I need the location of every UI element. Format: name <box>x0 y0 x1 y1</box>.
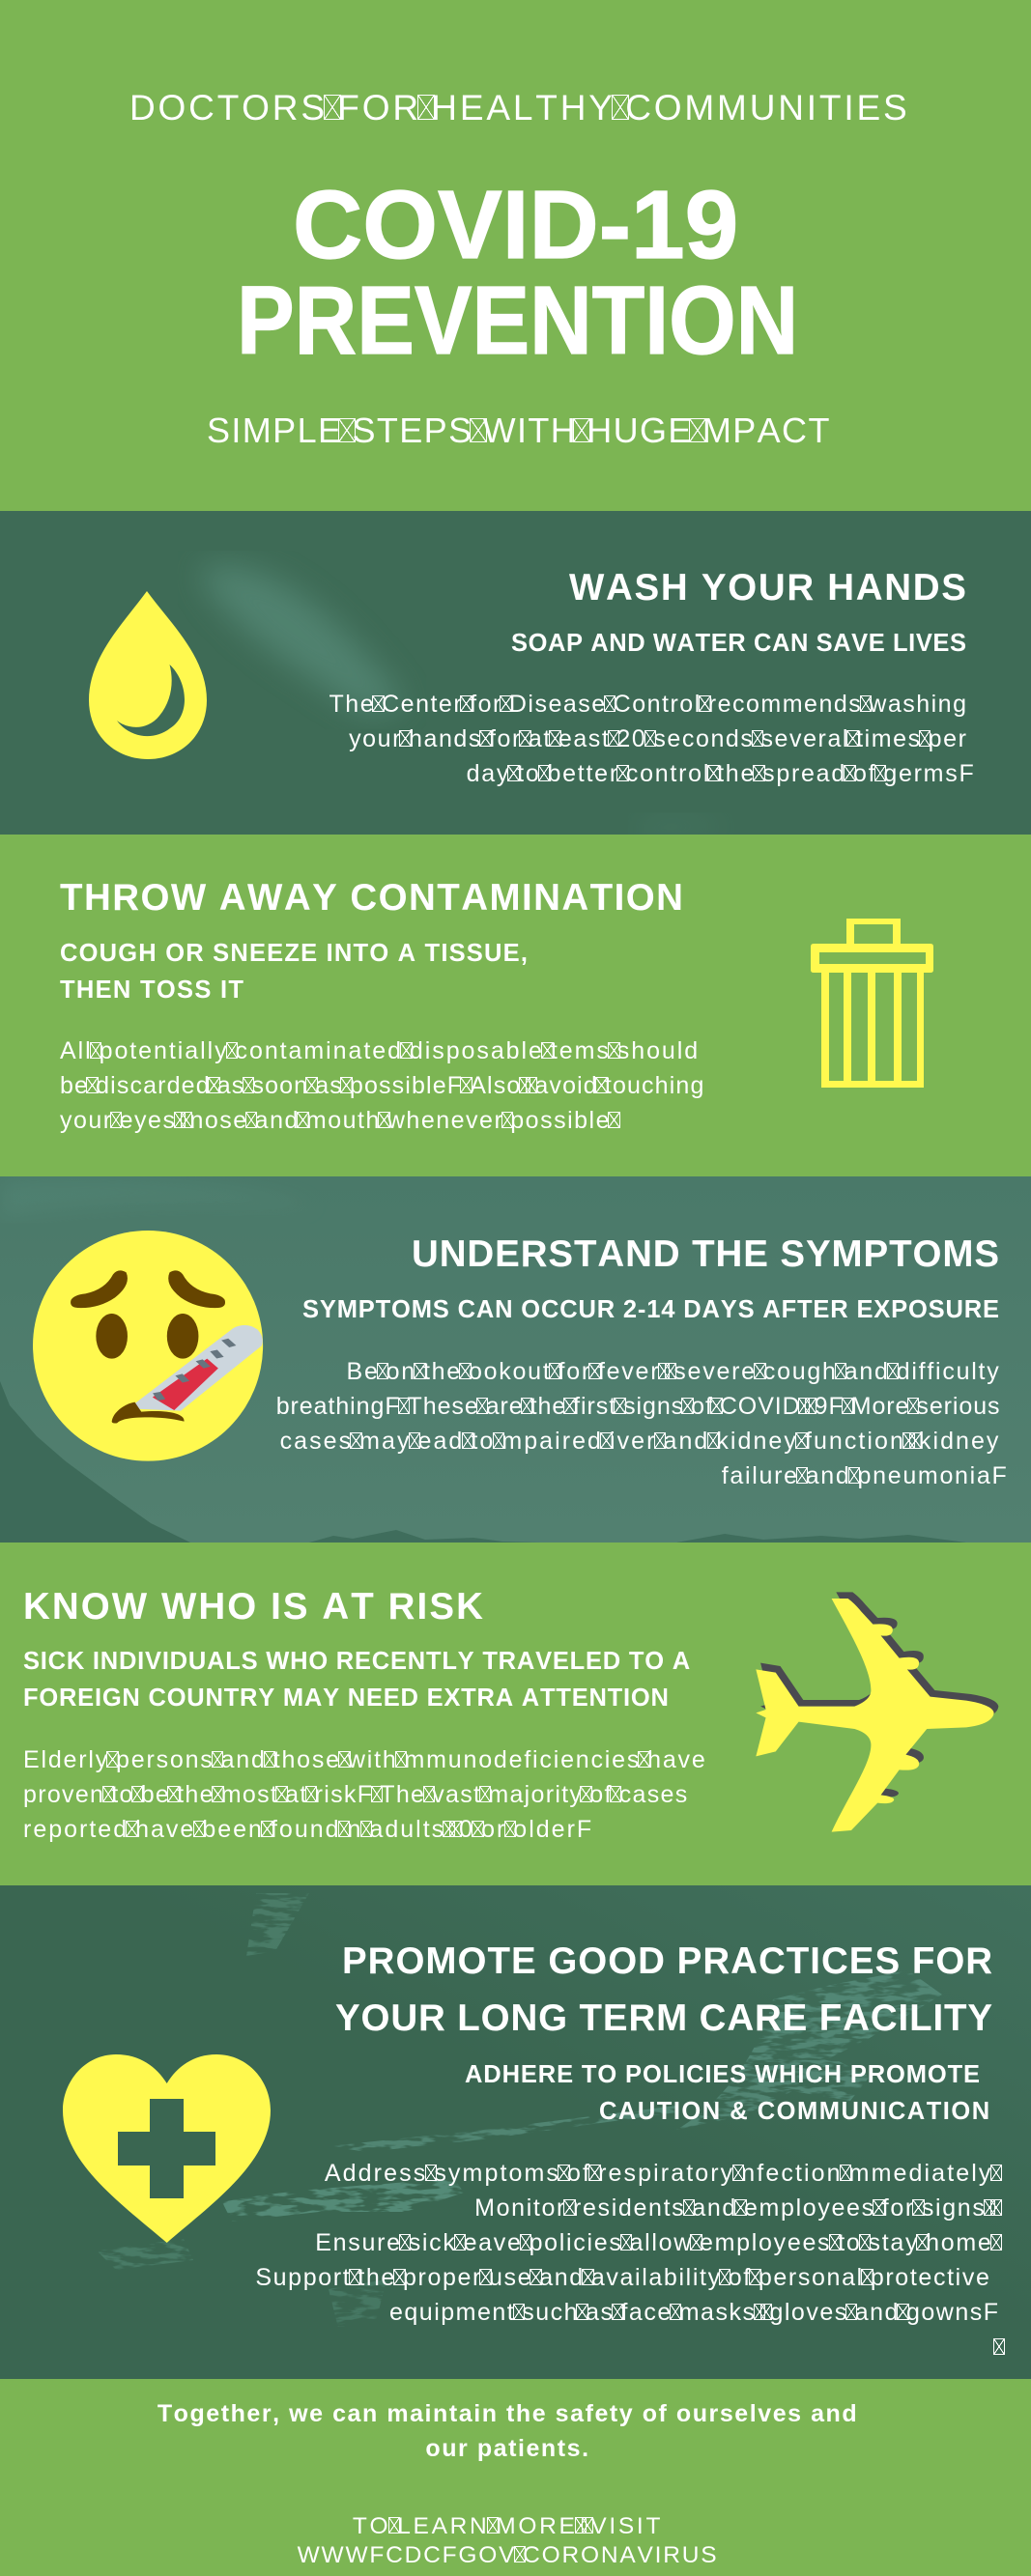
body text: failure and pneumoniaF <box>722 1462 1009 1489</box>
heading: KNOW WHO IS AT RISK <box>23 1586 485 1628</box>
title: PREVENTION <box>237 267 798 375</box>
body text: cases may ead to mpaired iver and kidney function kidney <box>280 1428 1001 1455</box>
body text <box>23 1746 707 1843</box>
title <box>237 171 798 375</box>
body text <box>255 2160 1005 2355</box>
heading <box>335 1940 993 2039</box>
body text: your eyes nose and mouth whenever possible <box>60 1107 611 1134</box>
body text: The Center for Disease Control recommends washing <box>329 691 968 718</box>
closing statement <box>158 2400 858 2462</box>
eyebrow: organisation name: DOCTORS FOR HEALTHY COMMUNITIES <box>129 88 910 127</box>
subheading: CAUTION & COMMUNICATION <box>599 2098 991 2125</box>
body text: breathingF These are the first signs of COVID 9F More serious <box>276 1393 1001 1420</box>
body text: Ensure sick eave policies allow employees to stay home <box>315 2229 993 2256</box>
body text: be discarded as soon as possibleF Also avoid touching <box>60 1072 705 1099</box>
subheading <box>465 2061 991 2125</box>
icon: water drop <box>89 591 207 759</box>
heading: PROMOTE GOOD PRACTICES FOR <box>342 1940 993 1982</box>
panel: promote good practices <box>0 1885 1031 2379</box>
subheading <box>60 940 529 1004</box>
subheading: THEN TOSS IT <box>60 977 244 1004</box>
subheading: FOREIGN COUNTRY MAY NEED EXTRA ATTENTION <box>23 1684 670 1712</box>
body text: Support the proper use and availability of personal protective <box>255 2264 991 2291</box>
panel: know who is at risk <box>0 1543 1031 1885</box>
body text <box>276 1358 1009 1489</box>
body text: reported have been found n adults 0 or olderF <box>23 1816 593 1843</box>
closing statement: Together, we can maintain the safety of ourselves and <box>158 2400 858 2427</box>
subheading: SOAP AND WATER CAN SAVE LIVES <box>511 630 967 657</box>
icon: heart with cross <box>63 2054 271 2243</box>
heading: YOUR LONG TERM CARE FACILITY <box>335 1997 993 2039</box>
body text: Monitor residents and employees for signs <box>474 2194 986 2222</box>
panel: footer <box>0 2379 1031 2576</box>
body text: proven to be the most at riskF The vast majority of cases <box>23 1781 688 1808</box>
body text: Elderly persons and those with mmunodeficiencies have <box>23 1746 707 1773</box>
title: COVID-19 <box>293 171 738 279</box>
heading: WASH YOUR HANDS <box>569 567 968 609</box>
icon: trash can <box>811 919 933 1088</box>
body text: All potentially contaminated disposable tems should <box>60 1037 700 1064</box>
panel: wash your hands <box>0 511 1031 835</box>
subheading <box>23 1648 691 1712</box>
heading: THROW AWAY CONTAMINATION <box>60 877 684 919</box>
subtitle: SIMPLE STEPS WITH HUGE MPACT <box>207 410 831 450</box>
closing statement: our patients. <box>425 2435 590 2462</box>
subheading: COUGH OR SNEEZE INTO A TISSUE, <box>60 940 529 967</box>
panel: throw away contamination <box>0 835 1031 1176</box>
body text <box>329 691 976 787</box>
body text: Be on the ookout for fever severe cough and difficulty <box>347 1358 1001 1385</box>
call to action link: WWWFCDCFGOV CORONAVIRUS <box>298 2542 718 2568</box>
icon: airplane <box>756 1592 999 1832</box>
subheading: ADHERE TO POLICIES WHICH PROMOTE <box>465 2061 981 2088</box>
heading: UNDERSTAND THE SYMPTOMS <box>412 1233 1000 1275</box>
panel: understand the symptoms <box>0 1176 1031 1543</box>
call to action link: TO LEARN MORE VISIT <box>353 2513 663 2539</box>
subheading: SYMPTOMS CAN OCCUR 2-14 DAYS AFTER EXPOSURE <box>302 1296 1000 1323</box>
panel: header <box>0 0 1031 511</box>
call to action link <box>298 2513 718 2568</box>
icon: face with thermometer <box>33 1231 263 1461</box>
body text: your hands for at east 20 seconds several times per <box>349 725 968 752</box>
body text <box>60 1037 705 1134</box>
body text: equipment such as face masks gloves and gownsF <box>389 2299 999 2326</box>
body text: day to better control the spread of germsF <box>467 760 976 787</box>
body text: Address symptoms of respiratory nfection mmediately <box>325 2160 993 2187</box>
subheading: SICK INDIVIDUALS WHO RECENTLY TRAVELED TO A <box>23 1648 691 1675</box>
